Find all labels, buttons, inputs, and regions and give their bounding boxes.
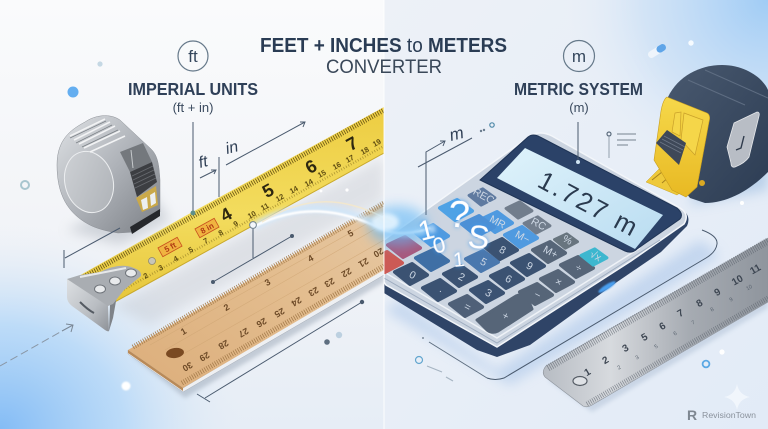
calculator key labels: + <box>500 310 511 323</box>
background: left panel <box>0 0 384 429</box>
ruler centimetre numbers <box>181 246 385 373</box>
ruler inch numbers: 2 <box>222 302 231 313</box>
tape shadow <box>113 156 384 325</box>
silver tape measure <box>57 116 170 245</box>
calculator key labels: 8 <box>497 244 508 257</box>
calculator key labels: · <box>436 285 445 297</box>
ruler centimetre numbers: 23 <box>307 285 320 298</box>
arrow: in <box>226 122 305 165</box>
title: FEET + INCHES to METERS <box>260 35 507 57</box>
background: right panel <box>384 0 768 429</box>
wooden ruler <box>128 203 385 398</box>
ruler inch numbers: 1 <box>179 326 188 337</box>
panel heading: imperial units: IMPERIAL UNITS <box>128 79 258 99</box>
ruler inch numbers: 4 <box>306 253 315 264</box>
calculator key labels: MR <box>487 213 508 232</box>
calculator key labels: REC <box>471 186 496 207</box>
tape small numbers: 2 <box>142 271 150 281</box>
calculator key labels: ÷ <box>573 262 584 275</box>
lock slider <box>656 130 686 165</box>
ruler centimetre numbers: 29 <box>198 350 211 363</box>
metal ruler numbers <box>583 262 763 379</box>
tape small numbers: 10 <box>246 209 258 221</box>
floating digits: ? <box>446 193 471 237</box>
tape big inch numbers: 5 <box>259 180 277 202</box>
tape case face <box>58 146 120 218</box>
icon: sparkle <box>724 384 750 410</box>
ruler centimetre numbers: 28 <box>217 338 230 351</box>
yellow measuring tape <box>77 107 384 303</box>
metal ruler numbers: 10 <box>730 273 746 288</box>
tape 5 ft marker: 5 ft <box>163 240 178 254</box>
ruler inch numbers <box>179 228 355 337</box>
tape lock button <box>130 162 157 197</box>
calculator key labels: M− <box>513 229 532 246</box>
calculator key labels: 0 <box>407 269 418 282</box>
label: ft: ft <box>197 153 210 172</box>
tape case window <box>120 143 152 172</box>
floating digits: 0 <box>430 232 448 259</box>
icon: blue capsule <box>647 43 667 59</box>
floating digits: S <box>466 218 491 256</box>
calculator reading: 1.727 m <box>533 165 643 242</box>
calculator key labels: % <box>560 233 574 248</box>
tape 8 in marker <box>195 218 219 238</box>
tape metal end hook <box>67 266 141 331</box>
decorative dots: right <box>688 40 744 367</box>
metal ruler numbers: 2 <box>601 354 611 367</box>
label: in: in <box>224 138 240 158</box>
tape big inch numbers: 4 <box>217 204 235 226</box>
icon: m badge: m <box>572 47 586 66</box>
tape small numbers: 17 <box>344 153 356 165</box>
floating digits <box>415 193 491 272</box>
panel heading: metric system: METRIC SYSTEM <box>514 79 643 99</box>
panel heading: metric system <box>514 40 643 115</box>
title <box>260 35 507 78</box>
tape small numbers: 4 <box>172 253 181 264</box>
tape small numbers: 14 <box>288 183 300 196</box>
calculator key labels <box>407 186 604 323</box>
metal ruler <box>543 238 768 412</box>
icon: ft badge: ft <box>188 47 198 66</box>
calculator key labels: × <box>553 276 564 289</box>
arrow: ft <box>200 170 216 178</box>
ruler hole <box>166 348 184 358</box>
title: CONVERTER <box>326 56 442 78</box>
metal ruler small numbers <box>617 284 754 371</box>
logo: RevisionTown: R <box>687 407 697 423</box>
calculator key labels: 9 <box>524 260 535 273</box>
tape 8 in marker: 8 in <box>199 221 216 236</box>
tape small numbers: 3 <box>157 263 165 273</box>
tape case grip ridges <box>70 119 125 152</box>
calculator key labels: 6 <box>503 273 514 286</box>
ruler centimetre numbers: 30 <box>181 360 194 373</box>
metal ruler small numbers: 10 <box>745 284 754 292</box>
calculator screen bezel <box>480 135 681 252</box>
metal ruler numbers: 3 <box>621 342 631 355</box>
tape small numbers: 15 <box>316 168 328 180</box>
panel heading: imperial units: (ft + in) <box>173 100 213 115</box>
calculator key labels: M+ <box>541 244 560 261</box>
tape small numbers: 16 <box>331 160 343 172</box>
tape small numbers: 9 <box>232 219 240 229</box>
arrow: m <box>426 141 445 215</box>
calculator key labels: 2 <box>456 271 467 284</box>
panel heading: imperial units <box>128 41 258 115</box>
tape small numbers: 14 <box>303 176 315 189</box>
tape 5 ft marker <box>158 237 182 257</box>
panel heading: metric system: (m) <box>569 100 589 115</box>
ruler centimetre numbers: 21 <box>357 256 370 269</box>
glow: conversion swoosh <box>250 188 435 246</box>
tape small numbers <box>142 137 383 281</box>
ruler inch numbers: 3 <box>263 277 272 288</box>
tape small numbers: 5 <box>187 245 195 255</box>
ruler centimetre numbers: 27 <box>237 326 250 339</box>
calculator key labels: − <box>532 289 543 302</box>
tape small numbers: 8 <box>217 228 225 238</box>
ruler centimetre numbers: 20 <box>372 246 385 259</box>
ruler centimetre numbers: 23 <box>323 276 336 289</box>
calculator key labels: √x <box>588 248 604 265</box>
floating digits: 1 <box>415 213 438 247</box>
calculator key labels: RC <box>529 215 548 233</box>
ruler centimetre numbers: 26 <box>255 316 268 329</box>
tape big inch numbers: 7 <box>343 133 361 155</box>
metal ruler numbers: 7 <box>676 307 686 320</box>
annotation lines: metric <box>416 122 717 381</box>
metal ruler numbers: 6 <box>658 320 668 333</box>
tape body <box>660 65 768 203</box>
tape big inch numbers <box>222 136 356 220</box>
tape small numbers: 11 <box>259 201 270 213</box>
centre divider <box>384 0 385 429</box>
metal ruler small numbers: 5 <box>654 344 659 350</box>
metal ruler small numbers: 3 <box>635 355 640 361</box>
dark and yellow tape measure <box>646 65 768 205</box>
yellow front housing <box>654 97 710 197</box>
metal ruler small numbers: 6 <box>673 331 678 337</box>
metal ruler small numbers: 7 <box>691 320 696 326</box>
metal ruler small numbers: 9 <box>729 297 734 303</box>
calculator key labels: = <box>462 301 473 314</box>
ruler centimetre numbers: 24 <box>290 295 303 308</box>
ruler centimetre numbers: 22 <box>340 266 353 279</box>
ruler hole <box>573 376 587 386</box>
tape big inch numbers: 6 <box>302 156 320 178</box>
logo: RevisionTown: RevisionTown <box>702 410 756 420</box>
logo: RevisionTown <box>687 407 756 423</box>
calculator key labels: 5 <box>478 256 489 269</box>
annotation lines: imperial <box>0 122 364 402</box>
metal ruler small numbers: 8 <box>710 307 715 313</box>
calculator key labels: 3 <box>483 287 494 300</box>
calculator <box>370 133 720 385</box>
metal ruler numbers: 5 <box>640 331 650 344</box>
label: m: m <box>447 123 466 145</box>
metal ruler numbers: 8 <box>695 297 705 310</box>
tape small numbers: 12 <box>274 192 286 204</box>
belt clip <box>727 112 759 167</box>
ruler centimetre numbers: 25 <box>273 306 286 319</box>
tape small numbers: 7 <box>202 236 210 246</box>
calculator keys <box>370 189 607 332</box>
ruler inch numbers: 5 <box>346 228 355 239</box>
metal ruler numbers: 1 <box>583 366 593 379</box>
metal ruler numbers: 11 <box>748 262 763 277</box>
floating digits: 1 <box>452 249 466 272</box>
tape small numbers: 18 <box>359 145 371 157</box>
calculator LCD <box>497 148 663 249</box>
extended tape tip <box>646 167 687 195</box>
metal ruler numbers: 9 <box>713 286 723 299</box>
metal ruler small numbers: 2 <box>617 365 622 371</box>
decorative dots: left <box>21 61 342 391</box>
tape small numbers: 19 <box>371 137 383 149</box>
